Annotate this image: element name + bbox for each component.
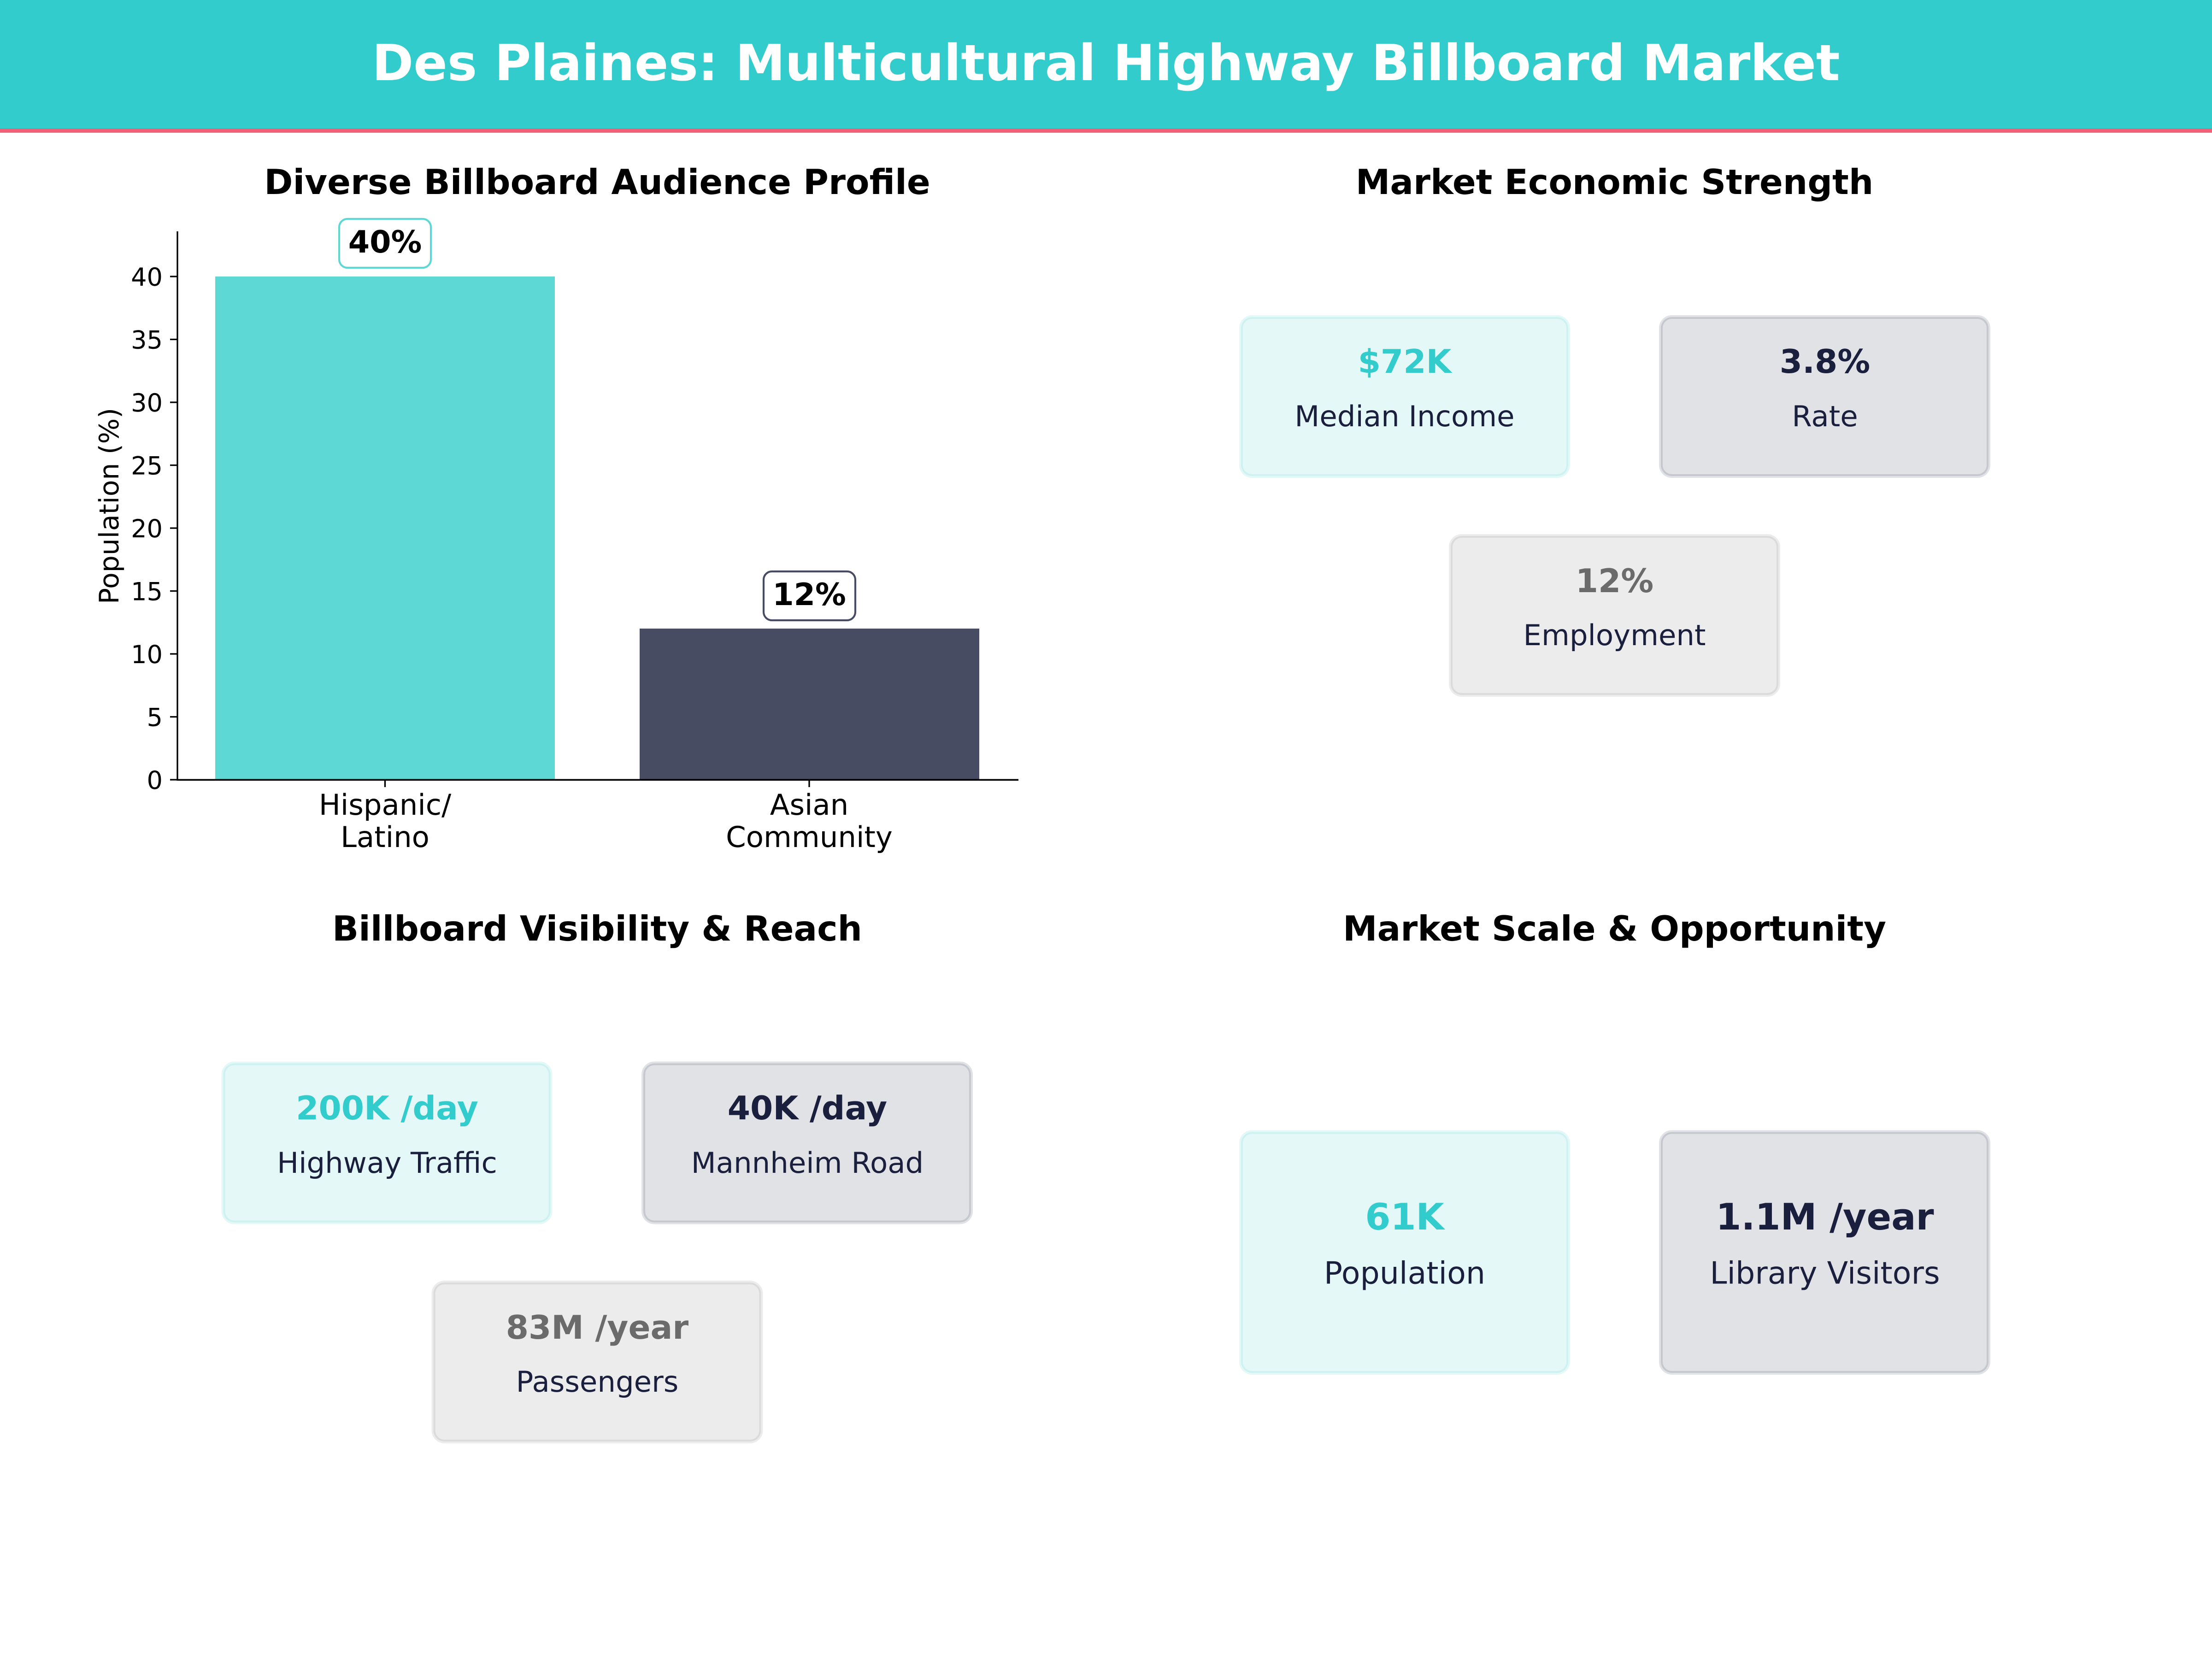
stat card: mannheim road [643, 1064, 971, 1222]
value callout: 40%: 40% [348, 224, 422, 260]
x label: Asian Community: Community [726, 820, 893, 854]
value callout: 12%: 12% [772, 577, 846, 612]
stat card: passengers: 83M /year [506, 1308, 688, 1347]
stat card: median income: $72K [1358, 342, 1453, 381]
stat card: population [1241, 1132, 1568, 1373]
stat card: mannheim road: 40K /day [728, 1089, 887, 1127]
stat card: rate: Rate [1792, 400, 1858, 433]
x label: Asian Community: Asian [770, 788, 848, 822]
stat card: median income [1241, 317, 1568, 476]
bar: Hispanic/Latino [215, 276, 555, 780]
stat card: passengers: Passengers [516, 1365, 678, 1399]
y axis [170, 231, 177, 781]
x axis [176, 780, 1018, 787]
stat card: employment [1451, 536, 1778, 695]
panel: market economic strength [1241, 162, 1988, 695]
stat card: mannheim road: Mannheim Road [691, 1146, 924, 1180]
stat card: library visitors: 1.1M /year [1716, 1196, 1934, 1238]
stat card: library visitors [1661, 1132, 1988, 1373]
y tick labels: 25 [131, 452, 163, 480]
value callout: 40% [339, 219, 431, 268]
y tick labels: 0 [147, 766, 163, 795]
stat card: highway traffic: 200K /day [296, 1089, 478, 1127]
heading: audience profile: Diverse Billboard Audience Profile [264, 162, 930, 202]
title: Des Plaines: Multicultural Highway Billboard Market [372, 34, 1840, 92]
stat card: employment: Employment [1523, 618, 1706, 652]
panel: billboard visibility and reach [223, 908, 971, 1441]
stat card: library visitors: Library Visitors [1710, 1255, 1940, 1291]
y tick labels: 30 [131, 388, 163, 418]
stat card: population: 61K [1365, 1196, 1445, 1238]
y tick labels: 5 [147, 703, 163, 732]
value callout: 12% [764, 571, 855, 620]
stat card: highway traffic: Highway Traffic [277, 1146, 497, 1180]
header banner [0, 0, 2212, 133]
stat card: passengers [433, 1282, 761, 1441]
stat card: rate [1661, 317, 1988, 476]
heading: economic strength: Market Economic Strength [1356, 162, 1873, 202]
stat card: population: Population [1324, 1255, 1485, 1291]
heading: visibility and reach: Billboard Visibility & Reach [332, 908, 862, 949]
stat card: rate: 3.8% [1780, 342, 1870, 381]
y tick labels [131, 263, 163, 795]
y tick labels: 40 [131, 263, 163, 292]
bar chart: population share [94, 219, 1018, 854]
panel: market scale and opportunity [1241, 908, 1988, 1373]
y tick labels: 20 [131, 514, 163, 543]
heading: scale and opportunity: Market Scale & Opportunity [1343, 908, 1886, 949]
x label: Hispanic/Latino: Hispanic/ [319, 788, 452, 822]
panel: diverse billboard audience profile [94, 162, 1018, 854]
bar: Asian Community [640, 629, 979, 780]
stat card: highway traffic [223, 1064, 550, 1222]
y tick labels: 35 [131, 325, 163, 355]
y tick labels: 10 [131, 640, 163, 669]
y tick labels: 15 [131, 577, 163, 606]
stat card: employment: 12% [1576, 562, 1653, 600]
stat card: median income: Median Income [1294, 400, 1515, 433]
x label: Hispanic/Latino: Latino [341, 820, 429, 854]
y axis label: Population (%) [94, 408, 125, 604]
